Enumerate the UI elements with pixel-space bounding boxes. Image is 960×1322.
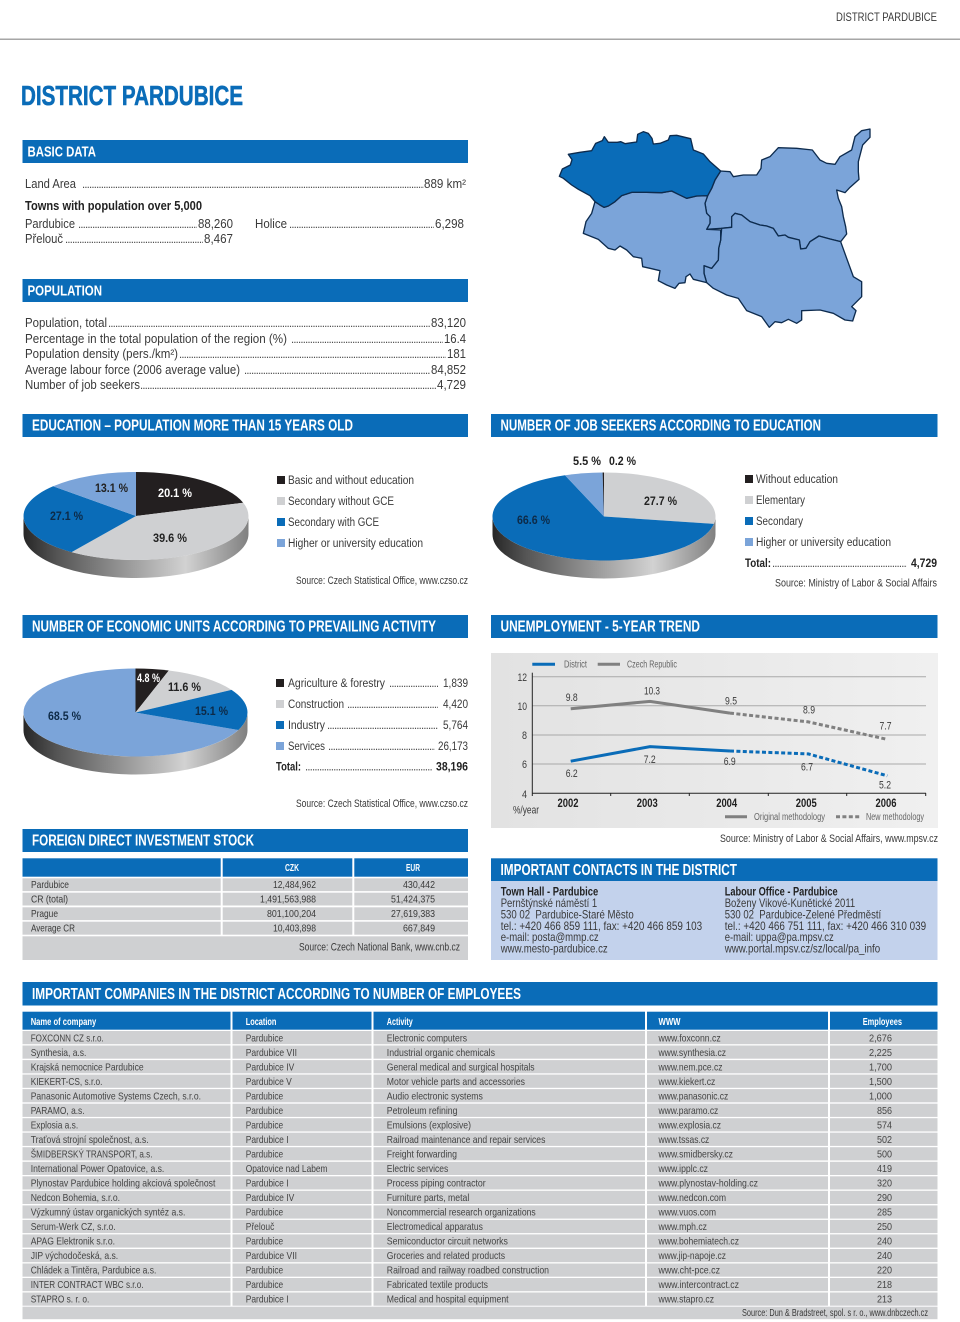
row: VUOS: Pardubice [246, 1208, 283, 1218]
FDI table header [22, 858, 468, 877]
series: District [571, 747, 887, 776]
row: International Power: Opatovice nad Labem [246, 1164, 328, 1175]
row: VUOS [22, 1205, 938, 1219]
row: APAG: www.bohemiatech.cz [658, 1236, 739, 1248]
row: Foxconn: FOXCONN CZ s.r.o. [31, 1034, 104, 1044]
panel: unemployment heading [491, 615, 938, 638]
legend: education: Source: Czech Statistical Office, www.czso.cz [296, 575, 468, 587]
row: Panasonic: Pardubice [246, 1092, 283, 1102]
row: Synthesia: Pardubice VII [246, 1048, 297, 1059]
row: Plynostav: 320 [877, 1178, 892, 1190]
data labels: 8.9 [803, 704, 815, 716]
companies table header: Location [246, 1017, 276, 1028]
panel: foreign direct investment [22, 829, 468, 960]
map: bottom left district [583, 191, 721, 288]
legend: job seekers: Total: [745, 556, 771, 570]
row: Explosia: Pardubice [246, 1120, 283, 1132]
row: Foxconn [22, 1031, 938, 1044]
legend: job seekers: Elementary [756, 493, 806, 507]
panel: contacts [491, 858, 938, 960]
y axis labels: 6 [522, 759, 527, 771]
row: APAG: APAG Elektronik s.r.o. [31, 1236, 115, 1248]
row: Synthesia: Synthesia, a.s. [31, 1048, 86, 1059]
row: JIP: 240 [877, 1251, 892, 1262]
pie chart: job seekers: 27.7 % [644, 494, 677, 508]
row: Nedcon: Pardubice IV [246, 1193, 294, 1204]
legend: economic units [276, 676, 468, 810]
legend: economic units: Industry [288, 718, 326, 732]
FDI row: Pardubice [22, 878, 468, 891]
legend: methodology [725, 812, 924, 823]
pie chart: job seekers: 5.5 % [573, 454, 601, 468]
FDI row: Average CR: 10,403,898 [273, 924, 316, 934]
row: Smidbersky: ŠMIDBERSKÝ TRANSPORT, a.s. [31, 1148, 153, 1160]
row: Tratova: Traťová strojní společnost, a.s. [31, 1135, 149, 1146]
panel: population: 84,852 [431, 362, 466, 377]
panel: basic data: Holice [255, 216, 287, 231]
contact: town hall: Town Hall - Pardubice [501, 884, 599, 898]
companies table header: WWW [658, 1017, 681, 1028]
pie chart: education: 27.1 % [50, 509, 83, 523]
panel: important companies [22, 982, 938, 1319]
row: Smidbersky: www.smidbersky.cz [658, 1150, 733, 1160]
panel: basic data: 6,298 [435, 216, 464, 231]
heading: basic data: BASIC DATA [28, 144, 96, 160]
pie chart: economic units [24, 668, 248, 775]
pie chart: economic units: 15.1 % [195, 704, 228, 718]
panel: economic units heading [22, 615, 468, 638]
x axis years: 2002 [558, 798, 578, 810]
row: Stapro [22, 1292, 938, 1306]
row: Inter Contract: Fabricated textile products [387, 1280, 488, 1291]
FDI row: Prague [22, 907, 468, 920]
pie chart: education: 20.1 % [158, 486, 192, 500]
map of the region [559, 129, 870, 327]
row: Inter Contract: INTER CONTRACT WBC s.r.o. [31, 1280, 144, 1291]
pie chart: job seekers: 66.6 % [517, 513, 550, 527]
contact: labour office: www.portal.mpsv.cz/sz/local/pa_info [724, 942, 881, 956]
data labels: 9.5 [725, 696, 737, 708]
map: Pardubice district highlighted [559, 132, 721, 207]
heading: FDI [22, 829, 468, 852]
companies table header: Activity [387, 1017, 413, 1028]
y axis labels: %/year [513, 804, 539, 816]
row: Nedcon [22, 1191, 938, 1204]
panel: basic data: 889 km² [424, 176, 467, 191]
row: VUOS: www.vuos.com [658, 1208, 716, 1218]
data labels: 7.2 [644, 754, 656, 766]
row: Krajska nemocnice [22, 1060, 938, 1074]
title: DISTRICT PARDUBICE [21, 80, 243, 111]
FDI row: CR total: 51,424,375 [391, 894, 435, 906]
panel: education heading: EDUCATION – POPULATION MORE THAN 15 YEARS OLD [32, 418, 353, 434]
row: Chladek a Tintera: Pardubice [246, 1266, 283, 1276]
map: right top district [705, 129, 870, 249]
row: Panasonic: Panasonic Automotive Systems Czech, s.r.o. [31, 1092, 201, 1102]
row: APAG: Semiconductor circuit networks [387, 1236, 508, 1248]
legend: economic units: 1,839 [443, 676, 468, 690]
y axis labels [513, 672, 539, 816]
pie chart: economic units: 11.6 % [168, 680, 201, 694]
row: Serum-Werk: Přelouč [246, 1222, 274, 1233]
row: Krajska nemocnice: Krajská nemocnice Pardubice [31, 1062, 144, 1074]
row: Chladek a Tintera: 220 [877, 1266, 892, 1276]
FDI row: Prague: 27,619,383 [391, 909, 435, 920]
row: Panasonic: 1,000 [869, 1092, 892, 1102]
data labels: 5.2 [879, 780, 891, 792]
row: Tratova: Pardubice I [246, 1135, 289, 1146]
legend: series: District [564, 660, 587, 670]
row: Kiekert: KIEKERT-CS, s.r.o. [31, 1077, 103, 1088]
row: Foxconn: Pardubice [246, 1034, 283, 1044]
panel: population: Population density (pers./km²) [25, 346, 178, 361]
y axis labels: 4 [522, 789, 527, 801]
contact: town hall: 530 02 Pardubice-Staré Město [501, 907, 634, 921]
legend: economic units: 5,764 [443, 718, 468, 732]
row: Panasonic: Audio electronic systems [387, 1092, 483, 1102]
row: Explosia: Emulsions (explosive) [387, 1120, 471, 1132]
pie chart: job seekers: 0.2 % [609, 454, 636, 468]
row: Synthesia: Industrial organic chemicals [387, 1048, 495, 1059]
row: Smidbersky: Freight forwarding [387, 1150, 457, 1160]
legend: economic units: 26,173 [438, 739, 468, 753]
row: Plynostav [22, 1176, 938, 1190]
heading: contacts: IMPORTANT CONTACTS IN THE DISTRICT [500, 862, 737, 879]
row: Chladek a Tintera [22, 1264, 938, 1277]
data labels: 7.7 [880, 720, 892, 732]
row: Plynostav: Process piping contractor [387, 1178, 486, 1190]
y axis labels: 8 [522, 730, 527, 742]
pie chart: education: 39.6 % [153, 531, 187, 545]
data labels: 6.7 [801, 762, 813, 774]
x axis years: 2005 [796, 798, 817, 810]
row: Plynostav: Plynostav Pardubice holding akciová společnost [31, 1178, 216, 1190]
row: International Power: International Power Opatovice, a.s. [31, 1164, 164, 1175]
contact: town hall: tel.: +420 466 859 111, fax: +420 466 859 103 [501, 919, 703, 933]
heading: FDI: FOREIGN DIRECT INVESTMENT STOCK [32, 832, 255, 850]
panel: population: Average labour force (2006 average value) [25, 362, 240, 377]
data labels [566, 686, 892, 792]
row: Paramo: Petroleum refining [387, 1106, 458, 1117]
panel: basic data: Pardubice [25, 216, 75, 231]
row: Explosia: 574 [877, 1120, 892, 1132]
x axis years: 2003 [637, 798, 658, 810]
row: Krajska nemocnice: www.nem.pce.cz [658, 1062, 722, 1074]
row: Synthesia: 2,225 [869, 1048, 892, 1059]
row: Stapro: STAPRO s. r. o. [31, 1294, 89, 1306]
row: Tratova: Railroad maintenance and repair services [387, 1135, 545, 1146]
data labels: 6.9 [724, 756, 736, 768]
contact: town hall [500, 884, 703, 956]
row: Serum-Werk [22, 1220, 938, 1233]
heading: contacts [491, 858, 938, 881]
row: Smidbersky [22, 1147, 938, 1160]
FDI row: Prague: 801,100,204 [267, 909, 316, 920]
panel: basic data [22, 140, 468, 246]
legend: series [532, 660, 677, 670]
contact: town hall: Pernštýnské náměstí 1 [501, 896, 597, 910]
row: Explosia [22, 1118, 938, 1132]
FDI row: Average CR [22, 922, 468, 935]
heading: population [22, 279, 468, 302]
row: International Power: www.ipplc.cz [658, 1164, 708, 1175]
companies table header: Name of company [31, 1017, 96, 1028]
companies source [22, 1307, 938, 1319]
row: Krajska nemocnice: 1,700 [869, 1062, 892, 1074]
row: Chladek a Tintera: Chládek a Tintěra, Pardubice a.s. [31, 1266, 156, 1276]
contact: labour office: Boženy Vikové-Kunětické 2011 [725, 896, 855, 910]
row: Smidbersky: Pardubice [246, 1150, 283, 1160]
y axis labels: 12 [518, 672, 527, 684]
y axis labels: 10 [518, 701, 527, 713]
legend: methodology: Original methodology [754, 812, 825, 823]
row: Tratova [22, 1133, 938, 1146]
row: Kiekert: 1,500 [869, 1077, 892, 1088]
data labels: 10.3 [644, 686, 660, 698]
row: Inter Contract: www.intercontract.cz [658, 1280, 739, 1291]
FDI row: CR total: CR (total) [31, 894, 68, 906]
contact: town hall: www.mesto-pardubice.cz [500, 942, 608, 956]
pie chart: education [24, 472, 248, 578]
legend: job seekers: Higher or university education [756, 535, 891, 549]
row: Stapro: www.stapro.cz [658, 1294, 714, 1306]
row: Stapro: 213 [877, 1294, 892, 1306]
row: Paramo: Pardubice [246, 1106, 283, 1117]
heading: population: POPULATION [28, 284, 102, 300]
heading: companies: IMPORTANT COMPANIES IN THE DISTRICT ACCORDING TO NUMBER OF EMPLOYEES [32, 986, 521, 1003]
line chart: unemployment trend [491, 653, 938, 828]
row: JIP: JIP východočeská, a.s. [31, 1251, 118, 1262]
legend: economic units: 4,420 [443, 697, 468, 711]
panel: economic units heading: NUMBER OF ECONOMIC UNITS ACCORDING TO PREVAILING ACTIVITY [32, 618, 436, 636]
row: Serum-Werk: 250 [877, 1222, 892, 1233]
legend: economic units: Services [288, 739, 325, 753]
row: Tratova: www.tssas.cz [658, 1135, 709, 1146]
row: JIP [22, 1249, 938, 1262]
row: VUOS: Výzkumný ústav organických syntéz a.s. [31, 1208, 185, 1218]
row: Kiekert: Pardubice V [246, 1077, 292, 1088]
row: Inter Contract [22, 1278, 938, 1291]
pie chart: economic units: 4.8 % [137, 671, 160, 685]
row: Krajska nemocnice: General medical and surgical hospitals [387, 1062, 535, 1074]
page header: DISTRICT PARDUBICE [836, 10, 937, 24]
FDI row: Pardubice: Pardubice [31, 880, 69, 891]
panel: population: Population, total [25, 315, 107, 330]
legend: education: Basic and without education [288, 473, 414, 487]
pie chart: education: 13.1 % [95, 481, 128, 495]
legend: job seekers: Secondary [756, 514, 804, 528]
FDI source [22, 936, 468, 960]
legend: education: Higher or university education [288, 536, 423, 550]
row: Inter Contract: 218 [877, 1280, 892, 1291]
data labels: 6.2 [566, 768, 578, 780]
legend: economic units: Source: Czech Statistical Office, www.czso.cz [296, 798, 468, 810]
row: Paramo [22, 1104, 938, 1117]
contact: labour office: 530 02 Pardubice-Zelené Předměstí [725, 907, 882, 921]
row: Nedcon: 290 [877, 1193, 892, 1204]
row: VUOS: 285 [877, 1208, 892, 1218]
companies table header [22, 1012, 938, 1030]
row: Kiekert: Motor vehicle parts and accessories [387, 1077, 525, 1088]
legend: job seekers: Without education [756, 472, 838, 486]
contact: town hall: e-mail: posta@mmp.cz [501, 930, 599, 944]
panel: basic data: 88,260 [198, 216, 233, 231]
FDI row: Pardubice: 430,442 [403, 880, 435, 891]
FDI row: Pardubice: 12,484,962 [273, 880, 316, 891]
legend: methodology: New methodology [866, 812, 924, 823]
panel: unemployment heading: UNEMPLOYMENT - 5-YEAR TREND [500, 618, 700, 636]
row: Foxconn: 2,676 [869, 1034, 892, 1044]
FDI row: Average CR: Average CR [31, 924, 75, 934]
row: Chladek a Tintera: Railroad and railway roadbed construction [387, 1266, 549, 1276]
legend: economic units: 38,196 [436, 760, 468, 774]
row: Paramo: 856 [877, 1106, 892, 1117]
legend: education: Secondary with GCE [288, 515, 379, 529]
row: Stapro: Pardubice I [246, 1294, 289, 1306]
panel: population: 181 [447, 346, 466, 361]
row: International Power: Electric services [387, 1164, 448, 1175]
row: JIP: Pardubice VII [246, 1251, 297, 1262]
map: bottom right district [704, 213, 862, 327]
row: Panasonic [22, 1089, 938, 1102]
row: Paramo: PARAMO, a.s. [31, 1106, 85, 1117]
legend: economic units: Agriculture & forestry [288, 676, 386, 690]
row: Krajska nemocnice: Pardubice IV [246, 1062, 294, 1074]
heading: basic data [22, 140, 468, 163]
companies table header: Employees [863, 1017, 902, 1028]
row: Paramo: www.paramo.cz [658, 1106, 718, 1117]
panel: population: 83,120 [431, 315, 466, 330]
pie chart: job seekers [492, 454, 716, 578]
row: VUOS: Noncommercial research organizations [387, 1208, 536, 1218]
row: International Power: 419 [877, 1164, 892, 1175]
row: International Power [22, 1162, 938, 1175]
row: Plynostav: www.plynostav-holding.cz [658, 1178, 758, 1190]
panel: population: Percentage in the total population of the region (%) [25, 331, 287, 346]
panel: basic data: Towns with population over 5,000 [25, 198, 202, 213]
row: APAG: Pardubice [246, 1236, 283, 1248]
legend: education: Secondary without GCE [288, 494, 394, 508]
contact: labour office: tel.: +420 466 751 111, fax: +420 466 310 039 [725, 919, 926, 933]
x axis years: 2006 [876, 798, 896, 810]
FDI row: CR total [22, 893, 468, 906]
row: Explosia: www.explosia.cz [658, 1120, 721, 1132]
row: Foxconn: www.foxconn.cz [658, 1034, 721, 1044]
x axis years [558, 798, 896, 810]
row: Kiekert [22, 1075, 938, 1088]
row: Inter Contract: Pardubice [246, 1280, 283, 1291]
row: Synthesia [22, 1046, 938, 1059]
row: Nedcon: Furniture parts, metal [387, 1193, 469, 1204]
FDI row: Prague: Prague [31, 909, 58, 920]
legend: economic units: Construction [288, 697, 344, 711]
legend: economic units: Total: [276, 760, 301, 774]
panel: population: 4,729 [437, 377, 466, 392]
row: Stapro: Medical and hospital equipment [387, 1294, 509, 1306]
series: Czech Republic [571, 701, 887, 739]
row: Smidbersky: 500 [877, 1150, 892, 1160]
row: Plynostav: Pardubice I [246, 1178, 289, 1190]
row: JIP: www.jip-napoje.cz [658, 1251, 726, 1262]
contact: labour office [724, 884, 926, 956]
panel: population: 16.4 [444, 331, 466, 346]
row: JIP: Groceries and related products [387, 1251, 505, 1262]
panel: basic data: 8,467 [204, 231, 233, 246]
row: Panasonic: www.panasonic.cz [658, 1092, 728, 1102]
row: Serum-Werk: Electromedical apparatus [387, 1222, 483, 1233]
row: Serum-Werk: Serum-Werk CZ, s.r.o. [31, 1222, 116, 1233]
row: APAG [22, 1234, 938, 1248]
FDI row: CR total: 1,491,563,988 [260, 894, 316, 906]
row: Explosia: Explosia a.s. [31, 1120, 78, 1132]
panel: population [22, 279, 468, 392]
contact: labour office: Labour Office - Pardubice [725, 884, 838, 898]
row: Foxconn: Electronic computers [387, 1034, 467, 1044]
legend: job seekers: 4,729 [911, 556, 937, 570]
legend: job seekers [745, 472, 937, 590]
panel: basic data: Land Area [25, 176, 77, 191]
FDI table header: CZK [285, 863, 299, 874]
panel: basic data: Přelouč [25, 231, 64, 246]
legend: education [277, 473, 468, 587]
row: Chladek a Tintera: www.cht-pce.cz [658, 1266, 720, 1276]
FDI table header: EUR [406, 863, 420, 874]
x axis years: 2004 [716, 798, 738, 810]
heading: companies [22, 982, 938, 1006]
row: Synthesia: www.synthesia.cz [658, 1048, 726, 1059]
data labels: 9.8 [566, 692, 578, 704]
FDI source: Source: Czech National Bank, www.cnb.cz [299, 942, 460, 954]
pie chart: economic units: 68.5 % [48, 709, 81, 723]
row: Kiekert: www.kiekert.cz [658, 1077, 715, 1088]
FDI row: Average CR: 667,849 [403, 924, 435, 934]
panel: job seekers heading: NUMBER OF JOB SEEKERS ACCORDING TO EDUCATION [500, 418, 821, 434]
row: Nedcon: Nedcon Bohemia, s.r.o. [31, 1193, 120, 1204]
legend: series: Czech Republic [627, 660, 677, 670]
contact: labour office: e-mail: uppa@pa.mpsv.cz [725, 930, 834, 944]
row: Tratova: 502 [877, 1135, 892, 1146]
row: Nedcon: www.nedcon.com [658, 1193, 726, 1204]
panel: population: Number of job seekers [25, 377, 140, 392]
row: Serum-Werk: www.mph.cz [658, 1222, 707, 1233]
row: APAG: 240 [877, 1236, 892, 1248]
